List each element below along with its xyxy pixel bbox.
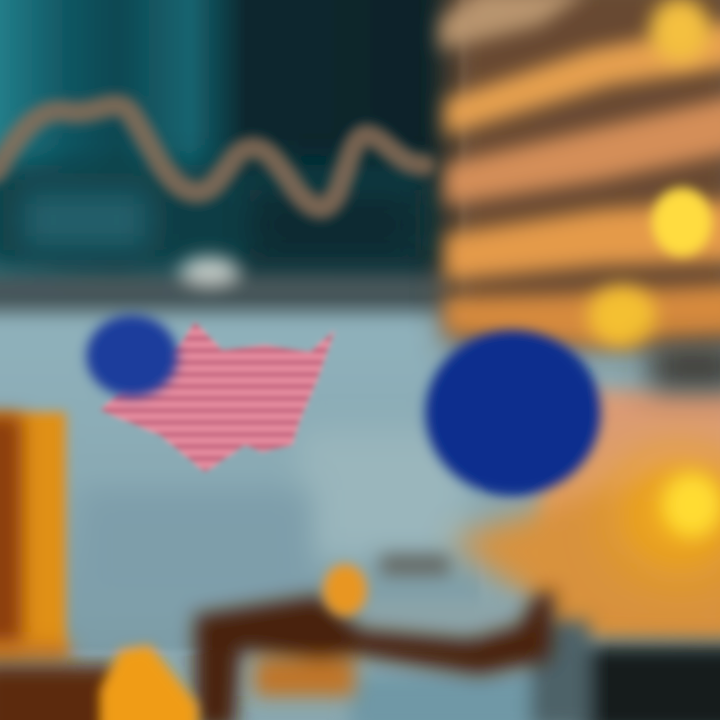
icon: setting sun: [620, 460, 720, 570]
icon: European Union blue circle: [425, 330, 601, 496]
panel: teal market backdrop: [0, 0, 460, 310]
icon: American flag map: [86, 315, 335, 472]
panel: sunset water: [450, 345, 720, 635]
icon: brown gavel: [195, 555, 555, 720]
panel: grey horizon band: [0, 257, 460, 312]
panel: dark foreground table: [0, 600, 720, 720]
panel: light blue lower field: [0, 300, 480, 650]
icon: gold cylinder: [323, 564, 367, 616]
icon: gold bar: [100, 645, 198, 720]
icon: building light glows: [588, 0, 712, 346]
icon: stacked gold column: [0, 412, 70, 662]
chart: wavy price line: [0, 105, 425, 208]
panel: orange building facade: [440, 0, 720, 345]
